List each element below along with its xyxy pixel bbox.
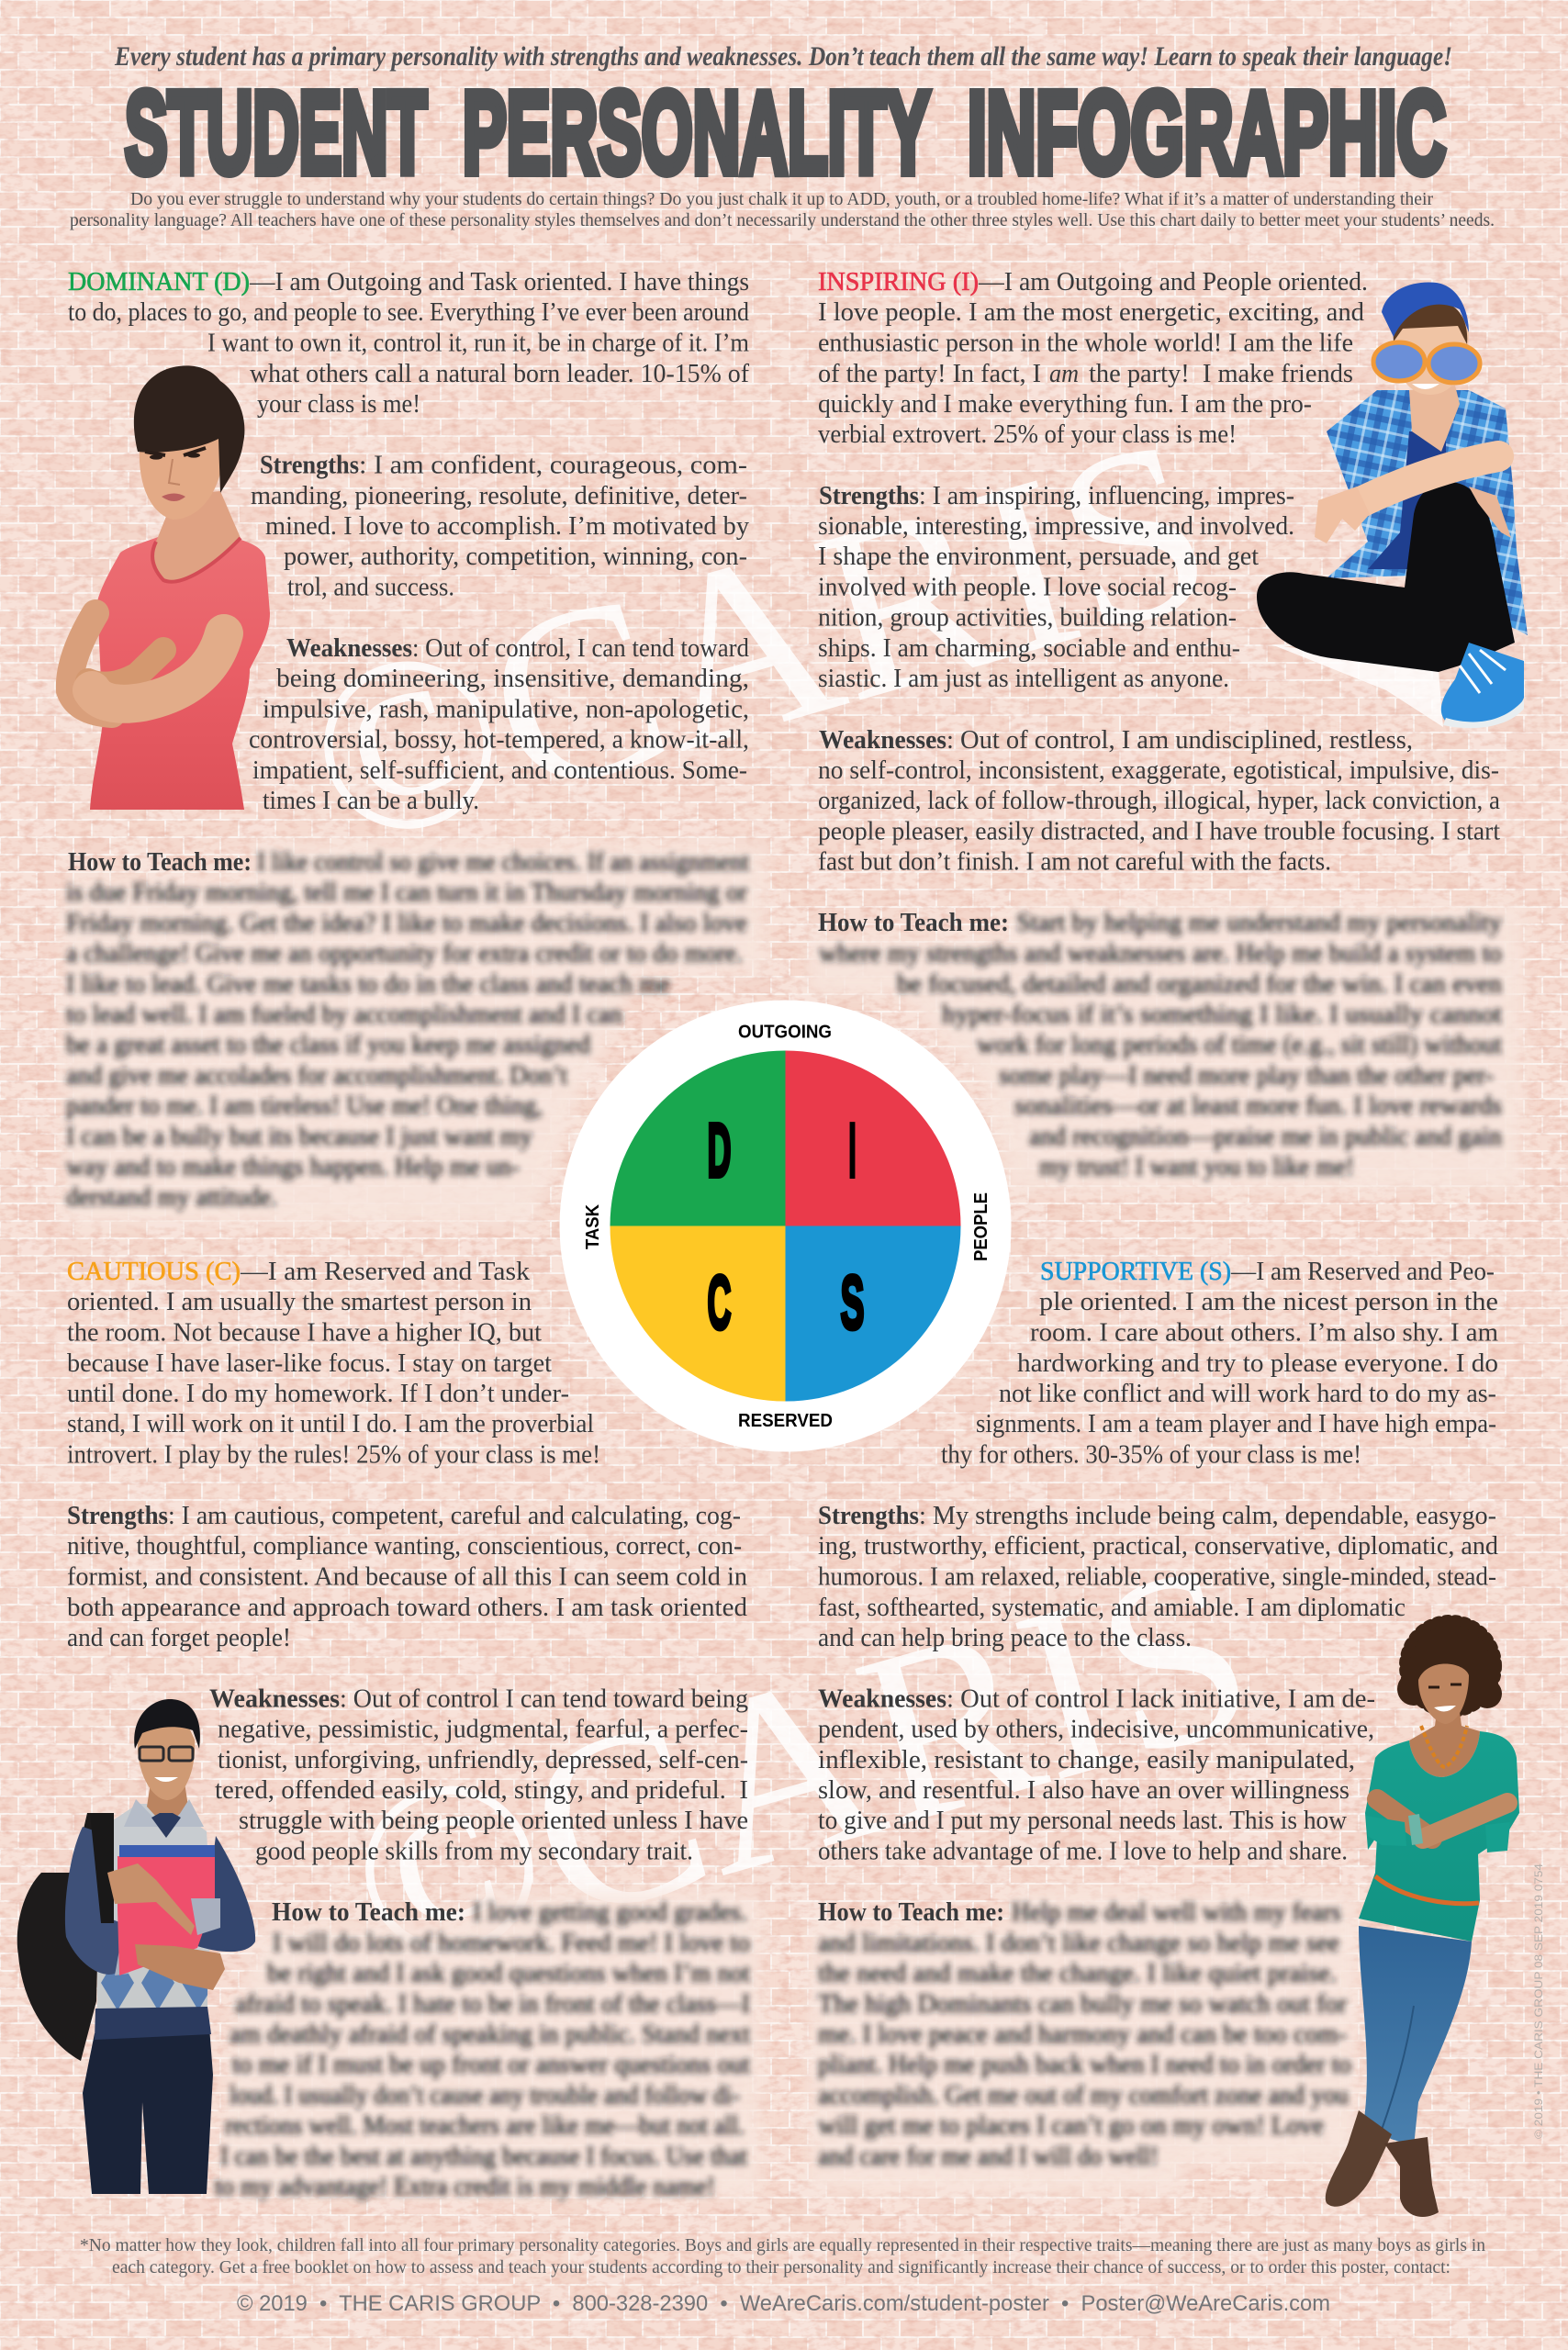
disc wheel: S xyxy=(841,1259,865,1345)
text: supportive how to teach: The high Dominants can bully me so watch out for xyxy=(818,1990,1348,2019)
text: supportive weaknesses: slow, and resentful. I also have an over willingness xyxy=(818,1776,1350,1805)
text: dominant strengths xyxy=(251,452,749,602)
intro paragraph: Do you ever struggle to understand why your students do certain things? Do you just chalk it up to ADD, youth, or a troubled home-life? What if it’s a matter of understanding their xyxy=(130,189,1433,209)
heading: cautious description: stand, I will work on it until I do. I am the proverbial xyxy=(67,1410,594,1438)
heading: supportive description: room. I care about others. I’m also shy. I am xyxy=(1030,1318,1498,1348)
heading: inspiring description: quickly and I make everything fun. I am the pro- xyxy=(818,390,1312,419)
text: cautious weaknesses: : Out of control I can tend toward being xyxy=(340,1685,748,1713)
heading: cautious description: until done. I do my homework. If I don’t under- xyxy=(67,1380,569,1408)
text: inspiring strengths: siastic. I am just as intelligent as anyone. xyxy=(818,665,1229,693)
text: supportive how to teach: Help me deal well with my fears xyxy=(1012,1898,1341,1927)
text: inspiring how to teach: Start by helping me understand my personality xyxy=(1016,909,1502,937)
text: inspiring weaknesses: people pleaser, easily distracted, and I have trouble focusing. I start xyxy=(818,817,1500,846)
text: inspiring how to teach: my trust! I want you to like me! xyxy=(1039,1153,1354,1181)
text: cautious how to teach: to me if I must be up front or answer questions out xyxy=(232,2051,750,2079)
heading: cautious description: CAUTIOUS (C) xyxy=(67,1258,241,1286)
text: supportive weaknesses: : Out of control I lack initiative, I am de- xyxy=(946,1685,1375,1713)
text: inspiring weaknesses: fast but don’t finish. I am not careful with the facts. xyxy=(818,848,1331,876)
text: inspiring how to teach: hyper-focus if it’s something I like. I usually cannot xyxy=(942,1001,1502,1029)
heading: dominant description: your class is me! xyxy=(257,390,420,419)
text: cautious how to teach: I can be the best at anything because I focus. Use that xyxy=(220,2143,747,2171)
text: inspiring weaknesses: : Out of control, I am undisciplined, restless, xyxy=(946,726,1413,755)
text: dominant strengths: power, authority, competition, winning, con- xyxy=(284,543,747,571)
heading: inspiring description: INSPIRING (I) xyxy=(818,268,979,297)
text: supportive strengths: and can help bring peace to the class. xyxy=(818,1624,1192,1652)
text: dominant how to teach: derstand my attitude. xyxy=(66,1183,277,1212)
photo: inspiring boy with big glasses xyxy=(1257,282,1528,728)
panel: inspiring xyxy=(808,268,1524,1192)
text: cautious how to teach: rections well. Most teachers are like me—but not all. xyxy=(225,2111,745,2141)
text: inspiring how to teach: some play—I need more play than the other per- xyxy=(999,1061,1494,1091)
text: inspiring strengths: I shape the environment, persuade, and get xyxy=(818,543,1259,571)
text: cautious how to teach xyxy=(215,1891,762,2201)
photo: dominant girl in coral shirt xyxy=(70,365,270,810)
heading: cautious description: oriented. I am usually the smartest person in xyxy=(67,1288,532,1316)
label: people: PEOPLE xyxy=(970,1192,991,1261)
heading: cautious description: introvert. I play by the rules! 25% of your class is me! xyxy=(67,1441,600,1469)
footnote xyxy=(80,2236,1485,2277)
heading: cautious description xyxy=(67,1258,600,1469)
text: cautious strengths xyxy=(67,1502,747,1652)
text: cautious how to teach: How to Teach me: xyxy=(272,1898,465,1927)
title: STUDENT xyxy=(125,68,427,197)
heading: inspiring description: of the party! In fact, I xyxy=(818,360,1041,388)
heading: supportive description: hardworking and try to please everyone. I do xyxy=(1017,1349,1498,1378)
heading: supportive description: not like conflict and will work hard to do my as- xyxy=(999,1380,1496,1408)
disc wheel xyxy=(560,1001,1012,1452)
heading: dominant description: I want to own it, control it, run it, be in charge of it. I’m xyxy=(207,329,749,358)
text: cautious strengths: and can forget people! xyxy=(67,1624,291,1652)
quadrant: supportive blue xyxy=(786,1226,960,1401)
text: cautious weaknesses: tered, offended easily, cold, stingy, and prideful. I xyxy=(215,1776,748,1805)
text: cautious how to teach: loud. I usually don’t cause any trouble and follow di- xyxy=(230,2082,740,2109)
text: inspiring how to teach: where my strengths and weaknesses are. Help me build a system to xyxy=(819,940,1502,968)
heading: supportive description: ple oriented. I am the nicest person in the xyxy=(1039,1288,1498,1316)
text: dominant strengths: trol, and success. xyxy=(287,573,454,602)
footnote: each category. Get a free booklet on how to assess and teach your students according to their personality and significantly increase their chance of success, or to order this poster, contact: xyxy=(112,2258,1450,2277)
text: inspiring weaknesses: organized, lack of follow-through, illogical, hyper, lack conviction, a xyxy=(818,787,1501,815)
text: cautious weaknesses xyxy=(209,1685,748,1865)
photo: supportive girl in teal top xyxy=(1326,1620,1519,2217)
text: supportive how to teach: pliant. Help me push back when I need to in order to xyxy=(818,2051,1351,2079)
heading: inspiring description xyxy=(818,268,1368,449)
heading: inspiring description: —I am Outgoing and People oriented. xyxy=(978,268,1368,297)
text: supportive how to teach: me. I love peace and harmony and can be too com- xyxy=(818,2020,1347,2049)
text: supportive how to teach: How to Teach me: xyxy=(818,1898,1004,1927)
text: cautious weaknesses: Weaknesses xyxy=(209,1685,340,1713)
text: supportive how to teach xyxy=(808,1891,1359,2194)
text: supportive weaknesses: to give and I put my personal needs last. This is how xyxy=(818,1807,1348,1835)
text: supportive strengths xyxy=(818,1502,1498,1652)
text: supportive strengths: humorous. I am relaxed, reliable, cooperative, single-minded, stead- xyxy=(818,1562,1496,1592)
text: cautious how to teach: afraid to speak. I hate to be in front of the class—I xyxy=(235,1990,750,2019)
text: cautious weaknesses: good people skills from my secondary trait. xyxy=(255,1838,693,1865)
disc wheel: I xyxy=(848,1107,856,1193)
text: dominant weaknesses: impulsive, rash, manipulative, non-apologetic, xyxy=(263,696,749,723)
heading: supportive description: SUPPORTIVE (S) xyxy=(1040,1258,1231,1286)
text: dominant weaknesses: : Out of control, I can tend toward xyxy=(412,634,749,663)
heading: supportive description xyxy=(941,1258,1498,1469)
quadrant: dominant green xyxy=(610,1050,786,1226)
text: inspiring strengths: : I am inspiring, influencing, impres- xyxy=(919,482,1294,510)
text: dominant how to teach: I like control so give me choices. If an assignment xyxy=(257,848,749,877)
heading: supportive description: thy for others. 30-35% of your class is me! xyxy=(941,1441,1361,1469)
heading: inspiring description: enthusiastic person in the whole world! I am the life xyxy=(818,329,1353,358)
heading: cautious description: the room. Not because I have a higher IQ, but xyxy=(67,1318,542,1348)
heading: dominant description xyxy=(68,268,750,419)
heading: dominant description: what others call a natural born leader. 10-15% of xyxy=(250,360,750,388)
panel: supportive xyxy=(808,1258,1498,2194)
heading: cautious description: —I am Reserved and Task xyxy=(240,1258,530,1286)
heading: dominant description: DOMINANT (D) xyxy=(68,268,250,297)
intro paragraph xyxy=(70,189,1495,230)
heading: supportive description: —I am Reserved and Peo- xyxy=(1230,1258,1495,1286)
text: dominant weaknesses: times I can be a bully. xyxy=(263,787,479,815)
text: inspiring weaknesses: no self-control, inconsistent, exaggerate, egotistical, impulsive, dis- xyxy=(818,756,1499,785)
text: cautious strengths: : I am cautious, competent, careful and calculating, cog- xyxy=(168,1502,741,1530)
text: supportive weaknesses: pendent, used by others, indecisive, uncommunicative, xyxy=(818,1715,1374,1744)
intro paragraph: personality language? All teachers have one of these personality styles themselves and don’t necessarily understand the other three styles well. Use this chart daily to better meet your students’ needs. xyxy=(70,210,1495,230)
text: dominant weaknesses xyxy=(249,634,749,815)
text: cautious strengths: formist, and consistent. And because of all this I can seem cold in xyxy=(67,1562,747,1592)
heading: dominant description: to do, places to go, and people to see. Everything I’ve ever been around xyxy=(68,298,749,327)
text: supportive how to teach: the need and make the change. I like quiet praise. xyxy=(818,1959,1337,1988)
text: cautious how to teach: am deathly afraid of speaking in public. Stand next xyxy=(230,2020,750,2049)
text: dominant how to teach: I like to lead. Give me tasks to do in the class and teach me xyxy=(66,970,670,999)
heading: inspiring description: am xyxy=(1049,360,1079,388)
quadrant: cautious yellow xyxy=(610,1226,786,1401)
label: reserved: RESERVED xyxy=(738,1410,833,1431)
heading: dominant description: —I am Outgoing and Task oriented. I have things xyxy=(249,268,749,297)
text: dominant how to teach: Friday morning. Get the idea? I like to make decisions. I also love xyxy=(66,909,747,938)
text: dominant how to teach: to lead well. I am fueled by accomplishment and I can xyxy=(66,1001,622,1029)
title: PERSONALITY xyxy=(463,68,930,197)
text: cautious how to teach: I love getting good grades. xyxy=(473,1898,747,1927)
text: inspiring how to teach: sonalities—or at least more fun. I love rewards xyxy=(1014,1092,1502,1120)
heading: inspiring description: I love people. I am the most energetic, exciting, and xyxy=(818,298,1364,327)
text: dominant weaknesses: Weaknesses xyxy=(286,634,412,663)
text: dominant how to teach: is due Friday morning, tell me I can turn it in Thursday morning or xyxy=(66,878,748,907)
text: cautious strengths: both appearance and approach toward others. I am task oriented xyxy=(67,1594,747,1622)
text: inspiring strengths: involved with people. I love social recog- xyxy=(818,573,1237,602)
text: supportive strengths: : My strengths include being calm, dependable, easygo- xyxy=(919,1502,1496,1530)
text: supportive how to teach: accomplish. Get me out of my comfort zone and you xyxy=(818,2082,1349,2109)
footnote: *No matter how they look, children fall into all four primary personality categories. Boys and girls are equally represented in their respective traits—meaning there are just as many boys as girls in xyxy=(80,2236,1485,2255)
contact line: © 2019 • THE CARIS GROUP • 800-328-2390 • WeAreCaris.com/student-poster • Poster@WeAreCaris.com xyxy=(237,2291,1330,2316)
photo: cautious boy with backpack and books xyxy=(17,1699,255,2194)
heading: inspiring description: the party! I make friends xyxy=(1089,360,1353,388)
heading: inspiring description: verbial extrovert. 25% of your class is me! xyxy=(818,420,1237,449)
text: cautious how to teach: be right and I ask good questions when I’m not xyxy=(267,1959,750,1988)
panel: cautious xyxy=(67,1258,762,2201)
watermark: caris logo lower: ©CARIS xyxy=(320,1509,1279,2026)
text: dominant how to teach: way and to make things happen. Help me un- xyxy=(66,1153,520,1181)
text: supportive weaknesses: others take advantage of me. I love to help and share. xyxy=(818,1838,1348,1865)
label: outgoing: OUTGOING xyxy=(738,1021,832,1043)
disc wheel: D xyxy=(707,1107,731,1193)
text: dominant how to teach: and give me accolades for accomplishment. Don’t xyxy=(66,1061,567,1091)
text: dominant strengths: Strengths xyxy=(260,452,359,479)
text: cautious strengths: Strengths xyxy=(67,1502,168,1530)
text: dominant strengths: manding, pioneering, resolute, definitive, deter- xyxy=(251,482,747,510)
heading: cautious description: because I have laser-like focus. I stay on target xyxy=(67,1349,552,1378)
text: supportive strengths: fast, softhearted, systematic, and amiable. I am diplomatic xyxy=(818,1594,1406,1622)
text: supportive strengths: Strengths xyxy=(818,1502,919,1530)
text: inspiring how to teach: and recognition—praise me in public and gain xyxy=(1029,1123,1502,1151)
text: dominant weaknesses: impatient, self-sufficient, and contentious. Some- xyxy=(252,756,747,785)
text: cautious weaknesses: tionist, unforgiving, unfriendly, depressed, self-cen- xyxy=(218,1746,748,1774)
text: supportive how to teach: and limitations. I don’t like change so help me see xyxy=(818,1930,1339,1957)
panel: dominant xyxy=(62,268,766,1225)
text: dominant how to teach: I can be a bully but its because I just want my xyxy=(66,1123,532,1151)
text: dominant how to teach: How to Teach me: xyxy=(68,848,252,877)
text: supportive strengths: ing, trustworthy, efficient, practical, conservative, diplomatic, and xyxy=(818,1532,1498,1561)
text: cautious weaknesses: negative, pessimistic, judgmental, fearful, a perfec- xyxy=(218,1715,748,1744)
text: dominant strengths: mined. I love to accomplish. I’m motivated by xyxy=(265,512,749,541)
watermark: caris logo upper: ©CARIS xyxy=(279,385,1238,901)
text: inspiring strengths: Strengths xyxy=(819,482,919,510)
text: dominant how to teach: pander to me. I am tireless! Use me! One thing, xyxy=(66,1092,543,1120)
text: dominant strengths: : I am confident, courageous, com- xyxy=(359,452,747,479)
text: supportive how to teach: and care for me and I will do well! xyxy=(818,2143,1159,2171)
title xyxy=(125,68,1446,197)
disc wheel: C xyxy=(707,1259,731,1345)
text: inspiring strengths: sionable, interesting, impressive, and involved. xyxy=(818,512,1294,541)
text: dominant how to teach: a challenge! Give me an opportunity for extra credit or to do more. xyxy=(66,940,743,968)
text: inspiring how to teach: be focused, detailed and organized for the win. I can even xyxy=(897,970,1502,999)
quadrant: inspiring red xyxy=(786,1050,960,1226)
text: inspiring weaknesses: Weaknesses xyxy=(819,726,946,755)
text: supportive how to teach: will get me to places I can’t go on my own! Love xyxy=(818,2111,1324,2141)
text: cautious weaknesses: struggle with being people oriented unless I have xyxy=(239,1807,748,1835)
text: inspiring strengths xyxy=(818,482,1294,693)
text: dominant weaknesses: controversial, bossy, hot-tempered, a know-it-all, xyxy=(249,725,749,755)
text: supportive weaknesses: Weaknesses xyxy=(818,1685,946,1713)
label: task: TASK xyxy=(582,1204,603,1249)
text: cautious how to teach: I will do lots of homework. Feed me! I love to xyxy=(273,1930,750,1957)
text: inspiring strengths: ships. I am charming, sociable and enthu- xyxy=(818,634,1240,663)
text: inspiring strengths: nition, group activities, building relation- xyxy=(818,604,1237,632)
vertical copyright note: © 2019 • THE CARIS GROUP 08 SEP 2019 0754 xyxy=(1532,1863,1545,2139)
text: cautious strengths: nitive, thoughtful, compliance wanting, conscientious, correct, con- xyxy=(67,1532,742,1561)
text: dominant weaknesses: being domineering, insensitive, demanding, xyxy=(276,665,749,693)
text: cautious how to teach: to my advantage! Extra credit is my middle name! xyxy=(215,2173,715,2201)
text: inspiring how to teach xyxy=(808,904,1524,1192)
text: inspiring how to teach: work for long periods of time (e.g., sit still) without xyxy=(977,1031,1502,1059)
text: inspiring weaknesses xyxy=(818,726,1501,876)
text: supportive weaknesses: inflexible, resistant to change, easily manipulated, xyxy=(818,1746,1355,1774)
heading: supportive description: signments. I am a team player and I have high empa- xyxy=(976,1410,1496,1438)
text: dominant how to teach xyxy=(62,843,766,1225)
text: dominant how to teach: be a great asset to the class if you keep me assigned xyxy=(66,1031,590,1059)
text: supportive weaknesses xyxy=(818,1685,1375,1865)
text: inspiring how to teach: How to Teach me: xyxy=(818,909,1009,937)
